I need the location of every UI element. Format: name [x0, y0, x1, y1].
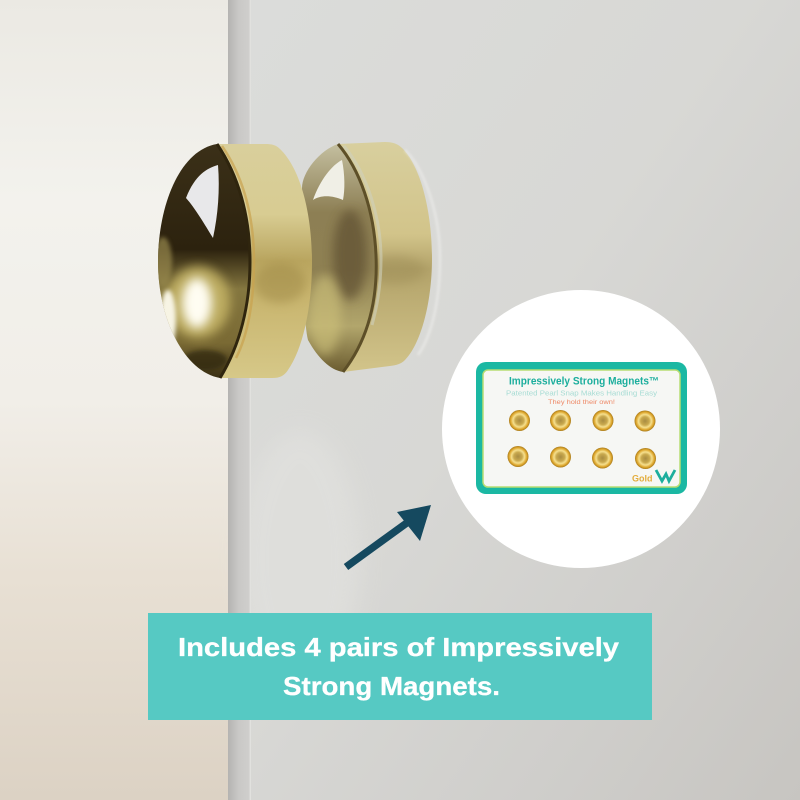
card title: Impressively Strong Magnets™	[509, 376, 659, 388]
gold snaps	[508, 410, 656, 469]
magnet: rear	[302, 142, 440, 372]
product card	[476, 362, 687, 494]
caption text: Includes 4 pairs of Impressively	[178, 632, 620, 662]
card tagline: They hold their own!	[548, 399, 615, 406]
magnet: front	[154, 144, 312, 378]
arrow	[346, 505, 431, 567]
gold label: Gold	[632, 474, 652, 484]
card subtitle: Patented Pearl Snap Makes Handling Easy	[506, 388, 657, 398]
caption text: Strong Magnets.	[283, 671, 500, 701]
caption banner	[148, 613, 652, 720]
logo	[656, 470, 675, 481]
white circle	[442, 290, 720, 568]
